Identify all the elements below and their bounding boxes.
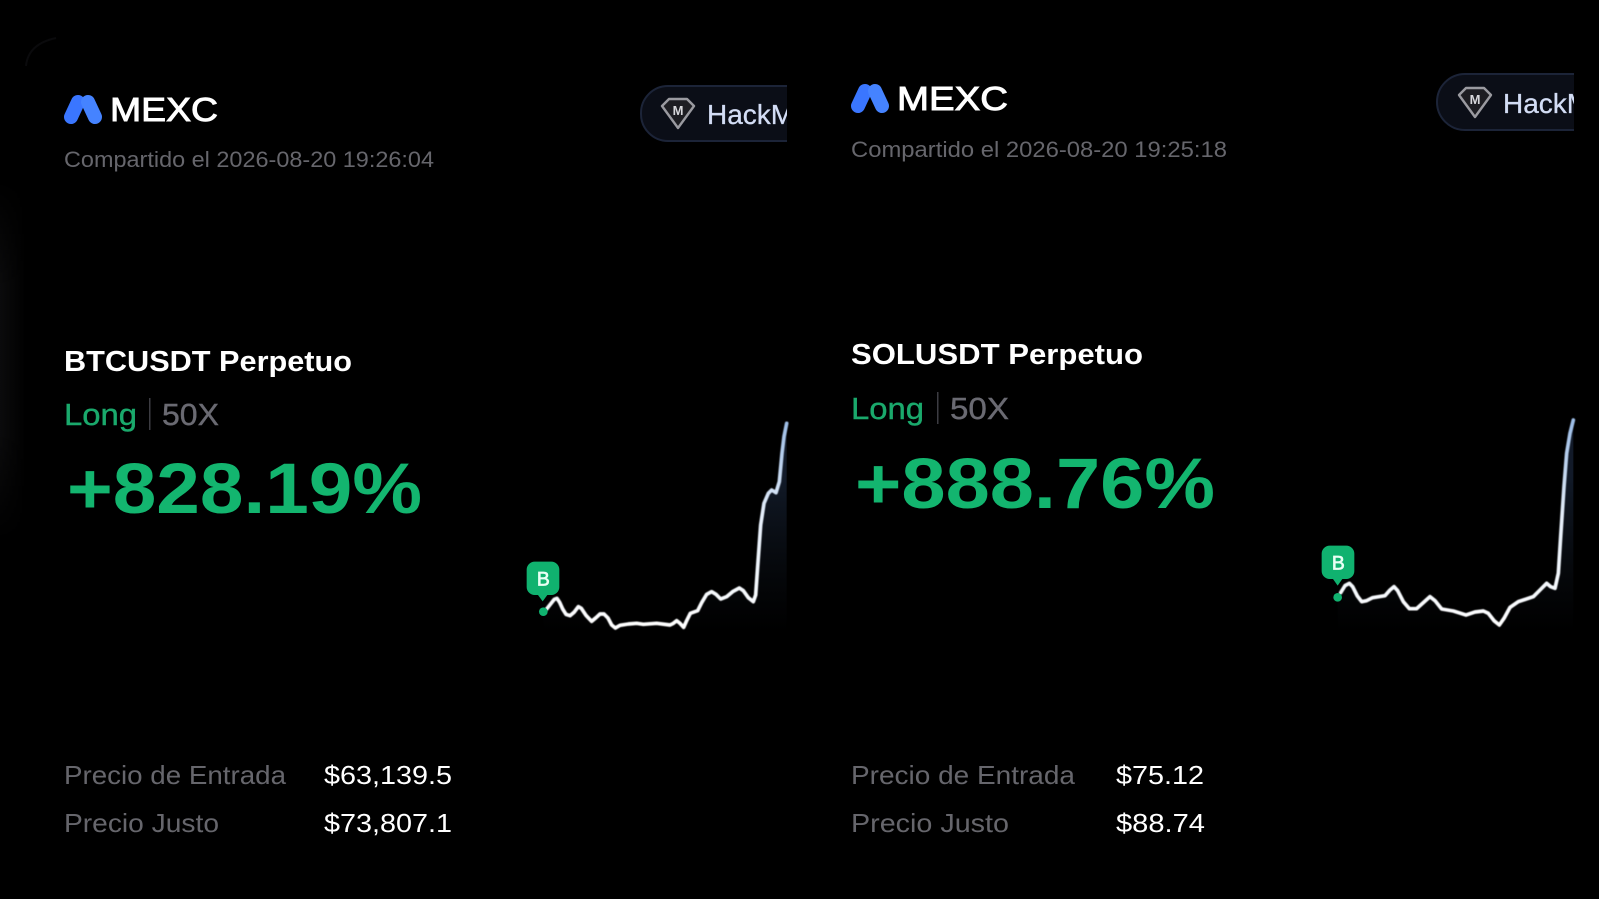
logo: MEXC: MEXC	[897, 80, 1008, 117]
badge: HackM user pill	[1436, 73, 1574, 131]
sparkline chart with buy marker	[1322, 420, 1573, 637]
badge: HackM user pill	[640, 85, 787, 142]
entry price row: $63,139.5	[324, 760, 452, 790]
entry price row	[64, 760, 452, 790]
shared timestamp: Compartido el 2026-08-20 19:26:04	[64, 147, 434, 172]
fair price row	[851, 808, 1205, 838]
entry price row: Precio de Entrada	[64, 760, 287, 790]
fair price row: $73,807.1	[324, 808, 452, 838]
sparkline chart with buy marker	[527, 423, 787, 637]
entry price row: $75.12	[1116, 760, 1204, 790]
sparkline chart with buy marker: B	[537, 570, 550, 591]
badge: HackM user pill: HackM	[707, 99, 794, 130]
position direction and leverage: 50X	[950, 391, 1009, 426]
logo: MEXC	[858, 80, 1008, 117]
shared timestamp: Compartido el 2026-08-20 19:25:18	[851, 137, 1227, 162]
panel: SOLUSDT share card	[851, 74, 1599, 838]
entry price row: Precio de Entrada	[851, 760, 1076, 790]
pair title: SOLUSDT Perpetuo	[851, 339, 1143, 371]
profit percentage: +888.76%	[855, 445, 1215, 524]
badge: HackM user pill: M	[673, 103, 683, 118]
badge: HackM user pill: HackM	[1503, 88, 1590, 119]
position direction and leverage: Long	[64, 397, 137, 432]
position direction and leverage	[64, 397, 219, 432]
profit percentage: +828.19%	[67, 450, 422, 529]
entry price row	[851, 760, 1204, 790]
logo: MEXC	[71, 91, 218, 128]
position direction and leverage: Long	[851, 391, 924, 426]
logo: MEXC: MEXC	[110, 91, 218, 128]
badge: HackM user pill: M	[1470, 92, 1480, 107]
position direction and leverage: 50X	[162, 397, 219, 432]
fair price row: Precio Justo	[64, 808, 219, 838]
fair price row: Precio Justo	[851, 808, 1009, 838]
panel: BTCUSDT share card	[64, 86, 841, 838]
pair title: BTCUSDT Perpetuo	[64, 346, 352, 378]
sparkline chart with buy marker: B	[1332, 553, 1345, 574]
fair price row: $88.74	[1116, 808, 1205, 838]
fair price row	[64, 808, 452, 838]
position direction and leverage	[851, 391, 1009, 426]
